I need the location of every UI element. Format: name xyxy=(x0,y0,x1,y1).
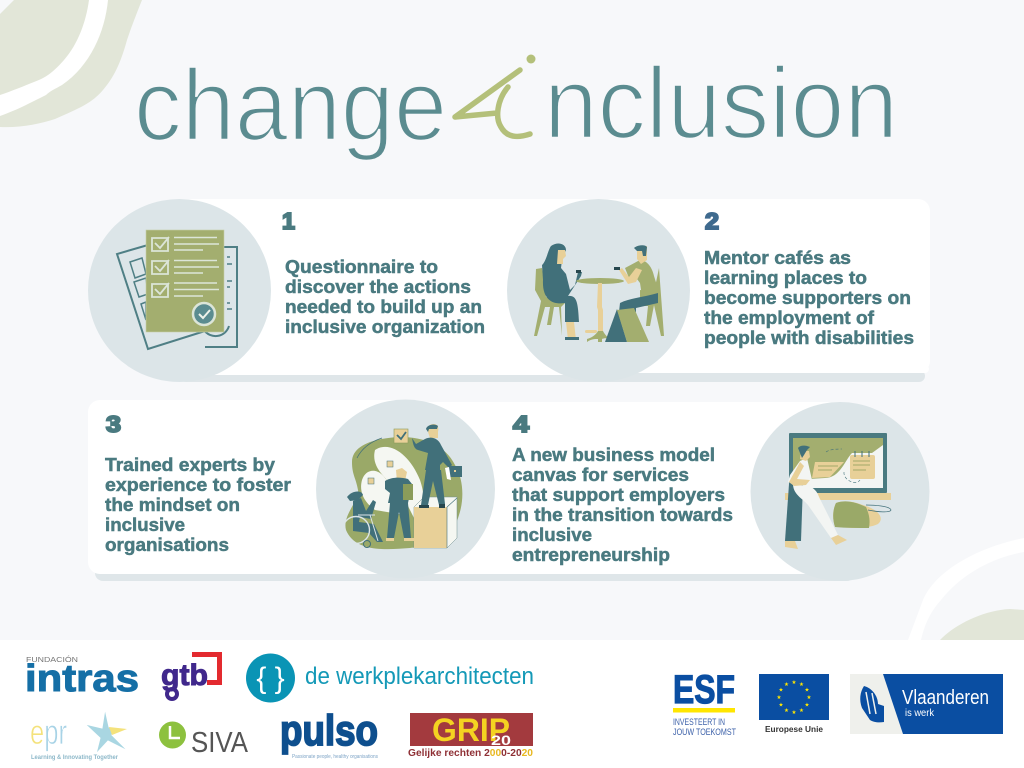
logo: ESF xyxy=(673,668,736,737)
text block 1: inclusive organization xyxy=(285,316,485,337)
text block 2: people with disabilities xyxy=(704,327,914,348)
logo: EU flag: Europese Unie xyxy=(765,724,823,734)
logo: ESF: INVESTEERT IN xyxy=(673,717,725,727)
text block 2: Mentor cafés as xyxy=(704,247,851,268)
logo: EU flag: ★ xyxy=(779,686,784,694)
text block 1 xyxy=(285,256,485,337)
title: change xyxy=(134,50,447,162)
icon: checklist papers xyxy=(117,230,237,349)
text block 4: canvas for services xyxy=(512,464,689,485)
logo: epr: epr xyxy=(30,713,67,752)
logo: EU flag: ★ xyxy=(792,679,797,686)
logo: epr xyxy=(30,709,128,761)
panel: step 1 xyxy=(88,199,925,382)
title xyxy=(134,48,898,162)
text block 2: learning places to xyxy=(704,267,867,288)
text block 3: Trained experts by xyxy=(105,454,276,475)
title: nclusion xyxy=(544,48,898,160)
logo: EU flag: ★ xyxy=(777,694,782,701)
text block 4: that support employers xyxy=(512,484,725,505)
number 2: 2 xyxy=(705,208,719,234)
logo: de werkplekarchitecten: { } xyxy=(256,662,285,695)
logo: de werkplekarchitecten: de werkplekarchitecten xyxy=(305,663,534,690)
logo: ESF: JOUW TOEKOMST xyxy=(673,727,736,737)
logo: GRIP: GRIP xyxy=(432,712,510,748)
panel: step 4 xyxy=(95,402,930,581)
logo: Fundacion Intras: intras xyxy=(25,658,139,700)
logo: Vlaanderen is werk: Vlaanderen xyxy=(902,687,989,709)
text block 2: the employment of xyxy=(704,307,875,328)
logo: EU flag: ★ xyxy=(784,707,789,714)
logo: EU flag: ★ xyxy=(799,707,804,714)
text block 3 xyxy=(105,454,291,555)
logo: GRIP: 20 xyxy=(491,732,511,748)
text block 4: A new business model xyxy=(512,444,715,465)
logo: Vlaanderen is werk: is werk xyxy=(905,708,935,719)
text block 1: discover the actions xyxy=(285,276,471,297)
logo: EU flag: ★ xyxy=(799,681,804,688)
text block 3: inclusive xyxy=(105,514,185,535)
text block 3: the mindset on xyxy=(105,494,240,515)
text block 4 xyxy=(512,444,733,565)
logo: gtb xyxy=(161,652,222,699)
footer band xyxy=(0,640,1024,768)
logo: EU flag: ★ xyxy=(792,709,797,716)
logo: SIVA: SIVA xyxy=(191,727,249,759)
illustration: experts xyxy=(342,424,462,549)
text block 3: organisations xyxy=(105,534,229,555)
logo: EU flag: ★ xyxy=(805,702,810,708)
logo: pulso: pulso xyxy=(280,707,378,755)
text block 2 xyxy=(704,247,914,348)
text block 2: become supporters on xyxy=(704,287,911,308)
text block 3: experience to foster xyxy=(105,474,291,495)
decorative leaf: top left xyxy=(0,0,142,127)
number 3: 3 xyxy=(106,411,121,437)
logo: EU flag xyxy=(759,674,829,734)
logo: EU flag: ★ xyxy=(807,694,812,701)
text block 1: needed to build up an xyxy=(285,296,482,317)
logo: epr: Learning & Innovating Together xyxy=(31,754,118,761)
logo: pulso: Passionate people, healthy organisations xyxy=(292,754,378,760)
panel: step 3 xyxy=(88,400,495,578)
logo: EU flag: ★ xyxy=(779,702,784,708)
logo: gtb: gtb xyxy=(161,659,208,692)
decorative leaf: bottom right xyxy=(908,538,1024,640)
illustration: mentor cafe xyxy=(534,243,664,342)
text block 4: in the transition towards xyxy=(512,504,733,525)
number 4: 4 xyxy=(513,411,529,437)
number 1: 1 xyxy=(282,208,295,234)
logo: de werkplekarchitecten xyxy=(246,654,534,702)
logo: EU flag: ★ xyxy=(784,681,789,688)
logo: GRIP: Gelijke rechten 2000-2020 xyxy=(408,747,533,759)
logo: GRIP xyxy=(408,712,533,759)
logo: ESF: ESF xyxy=(673,668,735,712)
panel: step 2 xyxy=(500,199,930,382)
logo: Fundacion Intras: FUNDACIÓN xyxy=(26,655,78,664)
text block 1: Questionnaire to xyxy=(285,256,438,277)
text block 4: entrepreneurship xyxy=(512,544,670,565)
logo: EU flag: ★ xyxy=(805,686,810,694)
title: stylised 4 and i xyxy=(455,54,536,136)
illustration: business model canvas xyxy=(785,433,891,549)
logo: SIVA xyxy=(159,722,249,759)
text block 4: inclusive xyxy=(512,524,592,545)
logo: Vlaanderen is werk xyxy=(850,674,1003,734)
